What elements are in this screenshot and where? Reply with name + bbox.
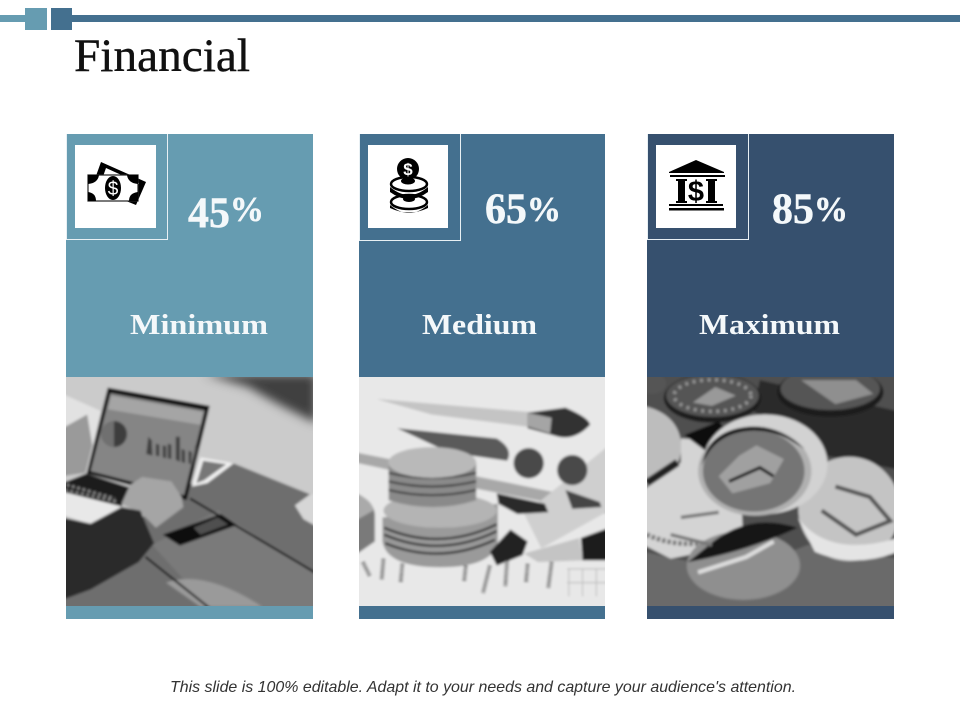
value: 85%: 85 <box>772 186 815 233</box>
value: 65%: % <box>527 190 561 229</box>
icon tile: money: $ <box>108 179 119 200</box>
photo: laptop at a wooden desk <box>62 374 317 609</box>
icon frame: minimum <box>66 134 168 240</box>
label: medium: Medium <box>422 310 537 341</box>
icon tile: coins <box>368 145 448 228</box>
label: maximum: Maximum <box>699 310 840 341</box>
value: 45%: % <box>230 190 264 229</box>
header decoration bar <box>0 8 960 30</box>
title: Financial <box>74 30 250 82</box>
icon frame: maximum <box>648 134 748 240</box>
photo: coins on a map <box>647 377 894 606</box>
panel: minimum <box>62 134 317 619</box>
label: minimum: Minimum <box>130 310 268 341</box>
icon tile: money <box>75 145 156 228</box>
icon tile: coins: $ <box>403 160 413 179</box>
photo: coin stacks and pens <box>355 374 609 609</box>
value: 65%: 65 <box>485 186 528 233</box>
value: 85%: % <box>814 190 848 229</box>
icon frame: medium <box>360 134 460 240</box>
value: 45%: 45 <box>188 190 231 237</box>
icon tile: bank <box>656 145 736 228</box>
panel: maximum <box>637 134 900 619</box>
footer note: This slide is 100% editable. Adapt it to your needs and capture your audience's attention. <box>170 679 796 696</box>
icon tile: bank: $ <box>688 176 704 208</box>
panel: medium <box>355 134 609 619</box>
